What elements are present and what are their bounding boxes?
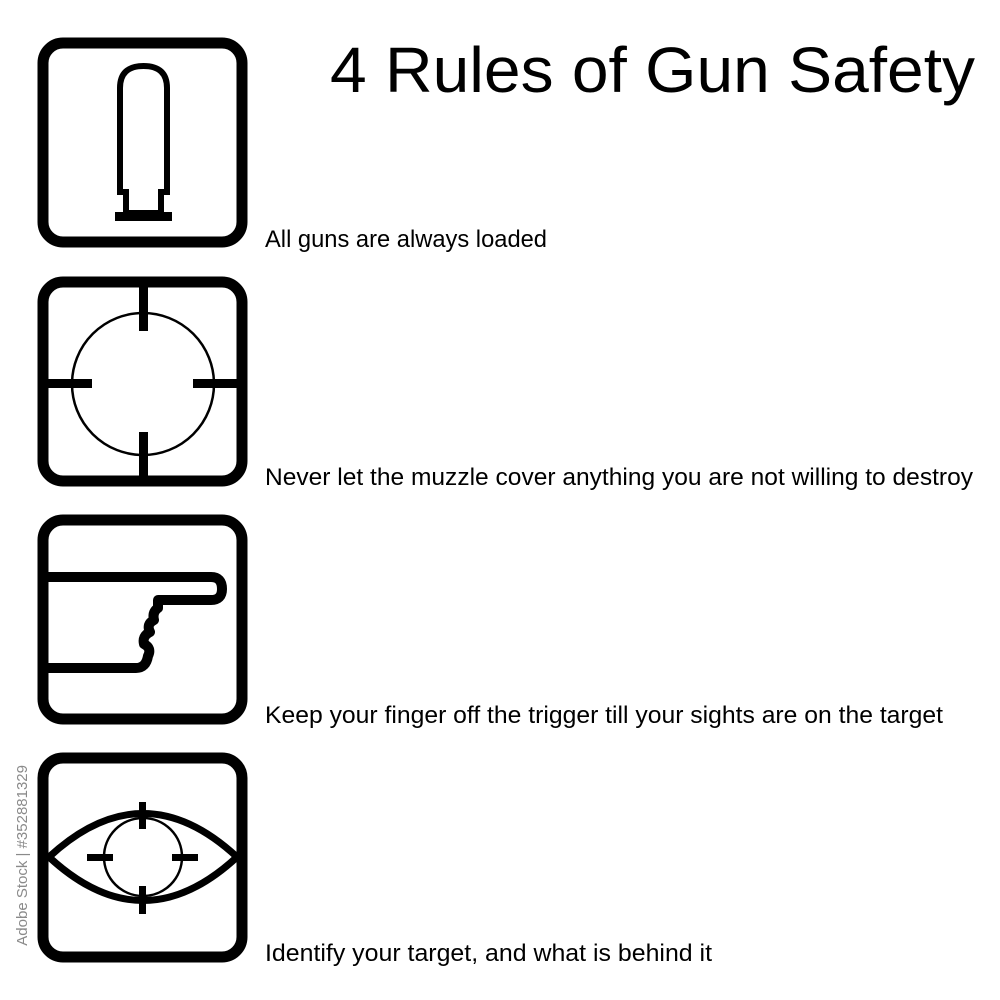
- panel: rule 2 icon crosshair: [43, 282, 242, 481]
- text: rule 2: Never let the muzzle cover anything you are not willing to destroy: [265, 464, 973, 491]
- panel: rule 1 icon bullet: [43, 43, 242, 242]
- icon: crosshair: [43, 282, 242, 481]
- watermark: Adobe Stock | #352881329: [14, 765, 31, 946]
- title: 4 Rules of Gun Safety: [330, 34, 975, 106]
- panel: rule 3 icon hand: [43, 520, 242, 719]
- icon: eye with crosshair: [49, 802, 237, 914]
- icon: pointing hand: [43, 577, 222, 668]
- panel: rule 4 icon eye: [43, 758, 242, 957]
- text: rule 1: All guns are always loaded: [265, 226, 547, 253]
- text: rule 4: Identify your target, and what is behind it: [265, 940, 712, 967]
- icon: bullet: [120, 66, 167, 213]
- text: rule 3: Keep your finger off the trigger till your sights are on the target: [265, 702, 943, 729]
